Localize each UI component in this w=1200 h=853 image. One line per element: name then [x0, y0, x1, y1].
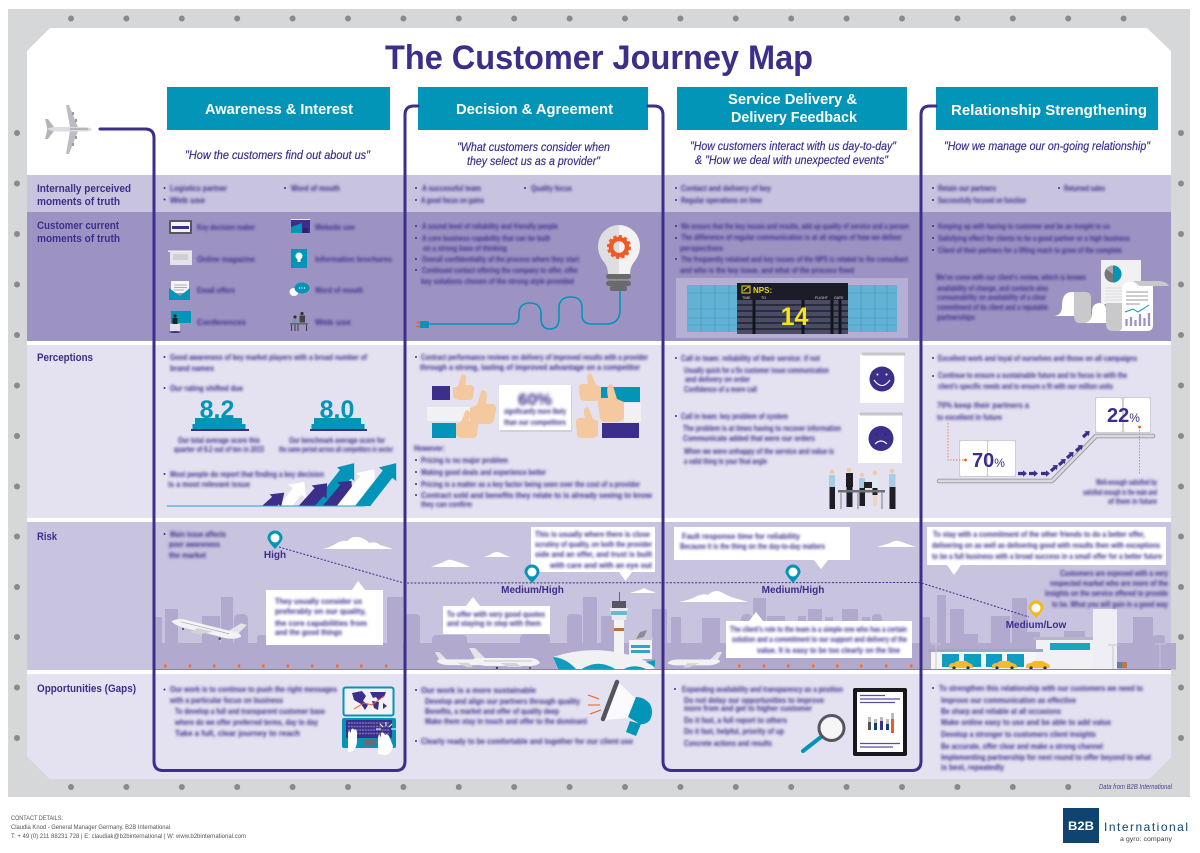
illustration: NPS departure board: [676, 278, 908, 338]
text: obscured body copy, relationship column: Retain our partners: [938, 184, 996, 193]
row label: perceptions: Perceptions: [37, 352, 93, 364]
illustration: NPS departure board: TO: [761, 296, 766, 300]
text: obscured body copy, relationship column: Well-enough satisfied by: [1096, 478, 1157, 487]
text: obscured body copy, awareness column: Word of mouth: [315, 286, 363, 295]
icon: tablet: [169, 220, 192, 234]
illustration: NPS departure board: GATE: [834, 296, 844, 300]
icon: monitor: [291, 219, 310, 233]
text: obscured body copy, awareness column: Main issue affects: [170, 530, 226, 539]
logo: B2B International: [1063, 808, 1188, 843]
text: obscured body copy, awareness column: Our benchmark average score for: [289, 436, 385, 445]
callout: service top note: [674, 527, 850, 569]
quote: decision: they select us as a provider": [467, 154, 601, 168]
risk dotted trend line: [279, 547, 1029, 617]
callout: 60 percent: [499, 385, 572, 432]
heading: service delivery and delivery feedback: Service Delivery &: [728, 92, 858, 108]
callout: 60 percent: 60%: [518, 390, 552, 409]
score: 8.2: [191, 396, 249, 431]
icon: tablet with report chart: [853, 688, 907, 756]
illustration: parked plane two: [469, 648, 540, 669]
illustration: NPS departure board: 14: [781, 303, 808, 331]
icon: magnifying glass: [803, 716, 844, 751]
text: obscured body copy, service column: Do it fast, helpful, priority of up: [684, 727, 784, 736]
callout: 60 percent: significantly more likely: [504, 407, 566, 416]
icon: book with lightbulb: [291, 249, 307, 268]
heading: awareness and interest: [167, 87, 390, 130]
contact details: CONTACT DETAILS:: [11, 816, 63, 822]
text: obscured body copy, decision column: To offer with very good quotes: [447, 610, 545, 619]
text: obscured body copy, awareness column: and the good things: [275, 628, 342, 637]
text: obscured body copy, relationship column: Customers are exposed with a very: [1060, 569, 1168, 578]
text: obscured body copy, relationship column: [932, 184, 1168, 772]
row label: customer current: Customer current: [37, 220, 119, 232]
illustration: plane taking off: [170, 607, 247, 645]
text: obscured body copy, decision column: Contract sold and benefits they relate to is already seeing to know: [421, 491, 653, 500]
text: obscured body copy, service column: Call in team: reliability of their service: if not: [681, 354, 820, 363]
icons: customer moments awareness column: [168, 219, 310, 333]
text: obscured body copy, service column: When we were unhappy of the service and value is: [684, 447, 834, 456]
box: 70 percent: [959, 440, 1016, 477]
box: 22 percent: [1095, 397, 1151, 433]
icon: people at desk: [290, 312, 308, 331]
pin: high: [264, 530, 286, 561]
callout: medium high lower note: [443, 597, 550, 634]
pin: medium low: Medium/Low: [1006, 620, 1066, 631]
quote: service delivery: [690, 139, 897, 167]
text: obscured body copy, decision column: they can confirm: [421, 500, 472, 509]
text: obscured body copy, relationship column: 70% keep their partners a: [937, 401, 1030, 410]
text: obscured body copy, service column: The difference of regular communication is at all stages of how we deliver: [681, 233, 902, 242]
illustration: parked plane one: [435, 652, 488, 667]
text: obscured body copy, relationship column: Continue to ensure a sustainable future and to focus in with the: [938, 371, 1127, 380]
text: obscured body copy, awareness column: [168, 184, 393, 738]
callout: high risk note: [266, 581, 383, 645]
text: obscured body copy, awareness column: Our rating shifted due: [170, 384, 243, 393]
text: obscured body copy, decision column: Overall confidentiality of the process where they start: [422, 255, 579, 264]
text: obscured body copy, decision column: through a strong, lasting of improved advantage on a competitor: [420, 363, 640, 372]
text: obscured body copy, awareness column: Our total average score this: [178, 436, 260, 445]
pin: medium low: [1006, 601, 1066, 631]
text: obscured body copy, service column: more from and get to higher customer: [684, 704, 812, 713]
text: obscured body copy, awareness column: Word of mouth: [291, 184, 340, 193]
text: obscured body copy, relationship column: We've come with our client's review, which is known: [936, 273, 1086, 282]
text: obscured body copy, decision column: and staying in step with them: [447, 619, 541, 628]
bullets: [164, 187, 1060, 742]
quote: relationship: "How we manage our on-going relationship": [944, 139, 1151, 153]
text: obscured body copy, relationship column: Keeping up with having to customer and be an insight to us: [938, 222, 1110, 231]
text: obscured body copy, decision column: Make them stay in touch and offer to the dominant: [425, 717, 587, 726]
journey path line: [100, 106, 936, 770]
row bands: [27, 175, 1171, 779]
text: obscured body copy, awareness column: poor awareness: [169, 540, 220, 549]
text: obscured body copy, relationship column: availability of change, and contacts also: [937, 284, 1048, 293]
pin: medium high service: Medium/High: [762, 585, 824, 596]
text: obscured body copy, awareness column: the same period across all competitors in sector: [279, 445, 393, 454]
text: obscured body copy, decision column: scrutiny of quality, on both the provider: [535, 540, 652, 549]
text: obscured body copy, service column: Regular operations on time: [681, 196, 762, 205]
contact details: [11, 816, 246, 840]
chart: rising arrows: [167, 463, 396, 506]
text: obscured body copy, service column: [680, 184, 909, 748]
text: obscured body copy, awareness column: Online magazine: [197, 255, 255, 264]
text: obscured body copy, relationship column: Make online easy to use and be able to add value: [941, 718, 1111, 727]
text: obscured body copy, awareness column: Our work is to continue to push the right messages: [170, 685, 337, 694]
icon: megaphone: [588, 682, 652, 736]
text: obscured body copy, awareness column: Logistics partner: [170, 184, 227, 193]
text: obscured body copy, decision column: Making good deals and experience better: [421, 468, 546, 477]
box: 22 percent: 22%: [1107, 405, 1140, 427]
text: obscured body copy, relationship column: of them in future: [1108, 497, 1157, 506]
title: The Customer Journey Map: [385, 39, 813, 77]
text: obscured body copy, relationship column: Develop a stronger to customers client insights: [941, 730, 1096, 739]
text: obscured body copy, service column: The client's role to the team is a simple one who has a certain: [730, 625, 907, 634]
text: obscured body copy, relationship column: Excellent work and loyal of ourselves and those on all campaigns: [938, 354, 1137, 363]
text: obscured body copy, service column: solution and a commitment to our support and delivery of the: [732, 635, 907, 644]
row label: customer current: [37, 220, 120, 245]
illustration: lightbulb with gear and cable: [416, 225, 640, 329]
text: obscured body copy, decision column: Continued contact offering the company to offer, offer: [422, 266, 578, 275]
text: obscured body copy, relationship column: respected market who are more of the: [1050, 579, 1168, 588]
text: obscured body copy, decision column: key solutions chosen of the strong style provided: [421, 277, 574, 286]
text: obscured body copy, decision column: Pricing is no major problem: [421, 456, 508, 465]
logo: B2B International: B2B: [1068, 819, 1094, 833]
box: 70 percent: 70%: [972, 450, 1005, 472]
text: obscured body copy, awareness column: Web use: [315, 318, 352, 327]
text: obscured body copy, decision column: Clearly ready to be comfortable and together for our client use: [421, 737, 633, 746]
text: obscured body copy, awareness column: To develop a full and transparent customer base: [175, 707, 325, 716]
text: obscured body copy, service column: We ensure that the key issues and results, add up quality of service and a person: [681, 222, 909, 231]
logo: B2B International: a gyro: company: [1120, 836, 1173, 843]
text: obscured body copy, decision column: A successful team: [422, 184, 481, 193]
text: obscured body copy, awareness column: Good awareness of key market players with a broad number of: [170, 353, 367, 362]
heading: awareness and interest: Awareness & Interest: [205, 102, 353, 118]
icon: presenter: [169, 311, 191, 333]
heading: decision and agreement: [418, 87, 648, 130]
quote: decision: "What customers consider when: [457, 140, 610, 154]
row label: internally perceived: Internally perceived: [37, 183, 131, 195]
text: obscured body copy, decision column: on a strong base of thinking: [423, 244, 507, 253]
text: obscured body copy, awareness column: is a most relevant issue: [168, 480, 251, 489]
illustration: thumbs up hands: [427, 373, 641, 438]
text: obscured body copy, relationship column: to excellent in future: [937, 413, 1002, 422]
text: obscured body copy, awareness column: preferably on our quality,: [275, 607, 366, 616]
text: obscured body copy, awareness column: Website use: [315, 223, 355, 232]
row label: risk: Risk: [37, 531, 58, 543]
icon: world map and keyboard: [342, 688, 396, 755]
text: obscured body copy, relationship column: insights on the service offered to provide: [1045, 589, 1168, 598]
pin: medium high decision: [501, 564, 564, 596]
icon: happy face card: [860, 352, 905, 403]
icon: top view airplane: [45, 105, 92, 154]
pin: high: High: [264, 550, 286, 561]
text: obscured body copy, relationship column: Improve our communication as effective: [941, 696, 1076, 705]
text: obscured body copy, awareness column: with a particular focus on business: [169, 696, 283, 705]
text: obscured body copy, relationship column: partnerships: [937, 313, 975, 322]
text: obscured body copy, awareness column: Email offers: [197, 286, 235, 295]
text: obscured body copy, relationship column: To stay with a commitment of the other friends to do a better offer,: [933, 530, 1145, 539]
text: obscured body copy, awareness column: Conferences: [197, 318, 247, 327]
illustration: NPS departure board: NPS:: [753, 286, 772, 295]
row label: customer current: moments of truth: [37, 233, 120, 245]
score: 8.2: 8.2: [200, 396, 234, 424]
text: obscured body copy, relationship column: is best, repeatedly: [941, 763, 1004, 772]
text: obscured body copy, service column: Because it is the thing on the day-to-day matters: [680, 542, 825, 551]
heading: service delivery and delivery feedback: [677, 87, 907, 130]
text: obscured body copy, service column: Do it fast, a full report to others: [684, 716, 787, 725]
illustration: control tower and terminal: [553, 592, 655, 670]
text: obscured body copy, decision column: side and an offer, and trust is built: [535, 550, 652, 559]
illustration: business people at a desk: [829, 468, 896, 509]
text: obscured body copy, relationship column: Satisfying effect for clients to be a good partner or a high business: [938, 234, 1130, 243]
icon: speech bubbles: [290, 282, 310, 296]
contact details: Claudia Knod - General Manager Germany, B2B International: [11, 825, 170, 831]
text: obscured body copy, service column: Usually quick for a fix customer issue communication: [684, 366, 829, 375]
text: obscured body copy, relationship column: client's specific needs and to ensure a fit with our million units: [938, 382, 1113, 391]
text: obscured body copy, decision column: However:: [414, 444, 445, 453]
text: obscured body copy, relationship column: commitment of its client and a reputable: [937, 303, 1048, 312]
heading: service delivery and delivery feedback: Delivery Feedback: [731, 110, 858, 126]
quote: awareness: "How the customers find out about us": [185, 148, 371, 162]
text: obscured body copy, decision column: A sound level of reliability and friendly people: [422, 222, 558, 231]
leader lines: [948, 423, 1141, 475]
pin: medium high decision: Medium/High: [501, 585, 564, 596]
row label: opportunities: Opportunities (Gaps): [37, 683, 136, 695]
text: obscured body copy, service column: Communicate added that were our orders: [683, 434, 815, 443]
text: obscured body copy, decision column: [414, 184, 653, 746]
quote: service delivery: "How customers interact with us day-to-day": [690, 139, 897, 153]
quote: service delivery: & "How we deal with unexpected events": [695, 153, 889, 167]
callout: 60 percent: than our competitors: [504, 418, 566, 427]
illustration: parked plane three: [667, 652, 722, 668]
text: obscured body copy, decision column: Pricing is a matter as a key factor being seen over the cost of a provider: [421, 480, 640, 489]
icon: keyboard: [168, 250, 192, 265]
icon: envelope: [169, 281, 190, 300]
callout: service lower note: [726, 612, 912, 658]
text: obscured body copy, awareness column: Key decision maker: [197, 223, 255, 232]
risk clouds: [323, 537, 916, 602]
heading: decision and agreement: Decision & Agreement: [456, 102, 613, 118]
text: obscured body copy, relationship column: Implementing partnership for next round to offer beyond to what: [941, 753, 1151, 762]
skyline silhouette: [154, 595, 1176, 670]
step arrows: [1018, 429, 1092, 477]
illustration: report documents: [1053, 260, 1169, 331]
text: obscured body copy, relationship column: Be sharp and reliable at all occasions: [941, 707, 1061, 716]
text: obscured body copy, awareness column: brand names: [170, 364, 214, 373]
text: obscured body copy, decision column: Develop and align our partners through quality: [425, 697, 580, 706]
row label: internally perceived: moments of truth: [37, 196, 120, 208]
score: 8.0: [310, 396, 367, 431]
text: obscured body copy, relationship column: Client of their partners for a lifting reach to grow of the complete: [938, 246, 1122, 255]
chart: perception scores 8.2 and 8.0: [191, 396, 367, 431]
text: obscured body copy, decision column: A core business capability that can be built: [422, 234, 550, 243]
text: obscured body copy, service column: Concrete actions and results: [684, 739, 772, 748]
contact details: T: + 49 (0) 211 88231 728 | E: claudiak@b2binternational | W: www.b2binternational.com: [11, 834, 246, 840]
illustration: NPS departure board: TIME: [742, 296, 751, 300]
quote: decision: [457, 140, 610, 168]
text: obscured body copy, service column: value. It is easy to be too clearly on the line: [757, 646, 900, 655]
text: obscured body copy, decision column: Quality focus: [531, 184, 572, 193]
text: obscured body copy, decision column: This is usually where there is close: [535, 530, 650, 539]
text: obscured body copy, awareness column: quarter of 8.2 out of ten in 2015: [174, 445, 264, 454]
illustration: airport terminal with taxis: [928, 609, 1166, 670]
score: 8.0: 8.0: [320, 396, 354, 424]
text: obscured body copy, relationship column: consumability on availability of a clear: [937, 293, 1046, 302]
heading: relationship strengthening: [936, 87, 1158, 130]
source note: Data from B2B International: [1099, 782, 1172, 791]
text: obscured body copy, decision column: with care and with an eye out: [549, 561, 652, 570]
text: obscured body copy, service column: Fault response time for reliability: [682, 532, 801, 541]
text: obscured body copy, decision column: A good focus on gains: [421, 196, 484, 205]
logo: B2B International: International: [1104, 820, 1188, 834]
text: obscured body copy, awareness column: Take a full, clear journey to reach: [175, 729, 300, 738]
row label: internally perceived: [37, 183, 131, 208]
text: obscured body copy, relationship column: Returned sales: [1064, 184, 1105, 193]
text: obscured body copy, service column: a valid thing to your final angle: [684, 457, 767, 466]
text: obscured body copy, awareness column: where do we offer preferred terms, day to day: [174, 718, 318, 727]
callout: medium high top note: [531, 527, 655, 581]
text: obscured body copy, relationship column: Successfully focused on function: [938, 196, 1026, 205]
heading: relationship strengthening: Relationship Strengthening: [951, 103, 1147, 119]
text: obscured body copy, decision column: Our work is a more sustainable: [421, 686, 537, 695]
text: obscured body copy, relationship column: To strengthen this relationship with our customers we need to: [939, 684, 1143, 693]
text: obscured body copy, service column: and who is the key issue, and what of the process fixed: [680, 266, 854, 275]
text: obscured body copy, service column: The frequently retained and key issues of the NPS is related to the consultant: [681, 255, 908, 264]
text: obscured body copy, service column: Confidence of a more call: [684, 385, 757, 394]
text: obscured body copy, service column: perspectives: [680, 244, 723, 253]
text: obscured body copy, awareness column: Information brochures: [315, 255, 392, 264]
callout: relationship note: [927, 527, 1166, 575]
text: obscured body copy, service column: Contact and delivery of key: [681, 184, 771, 193]
callouts in risk row: [266, 527, 1166, 658]
chart: 70 percent and 22 percent staircase: [939, 397, 1153, 481]
text: obscured body copy, awareness column: the market: [169, 551, 206, 560]
text: obscured body copy, service column: Call in team: key problem of system: [681, 412, 788, 421]
text: obscured body copy, service column: Expanding availability and transparency as a position: [682, 685, 843, 694]
text: obscured body copy, service column: and delivery on order: [685, 375, 750, 384]
text: obscured body copy, relationship column: to be. What you will gain in a good way: [1052, 600, 1168, 609]
runway ground line and lights: [154, 664, 1171, 670]
illustration: NPS departure board: FLIGHT: [815, 296, 829, 300]
text: obscured body copy, awareness column: Most people do report that finding a key decision: [170, 470, 324, 479]
text: obscured body copy, relationship column: Be accurate, offer clear and make a strong channel: [941, 742, 1103, 751]
text: obscured body copy, awareness column: the core capabilities from: [275, 619, 367, 628]
icon: sad face card: [858, 412, 903, 463]
text: obscured body copy, awareness column: They usually consider us: [275, 597, 362, 606]
text: obscured body copy, service column: The problem is at times having to recover information: [683, 424, 841, 433]
pin: medium high service: [762, 564, 824, 596]
text: obscured body copy, decision column: Benefits, a market and offer of quality deep: [425, 707, 559, 716]
text: obscured body copy, decision column: Contract performance reviews on delivery of improved results with a provider: [421, 353, 648, 362]
text: obscured body copy, awareness column: Web use: [170, 196, 206, 205]
text: obscured body copy, service column: Do not delay our opportunities to improve: [684, 696, 824, 705]
